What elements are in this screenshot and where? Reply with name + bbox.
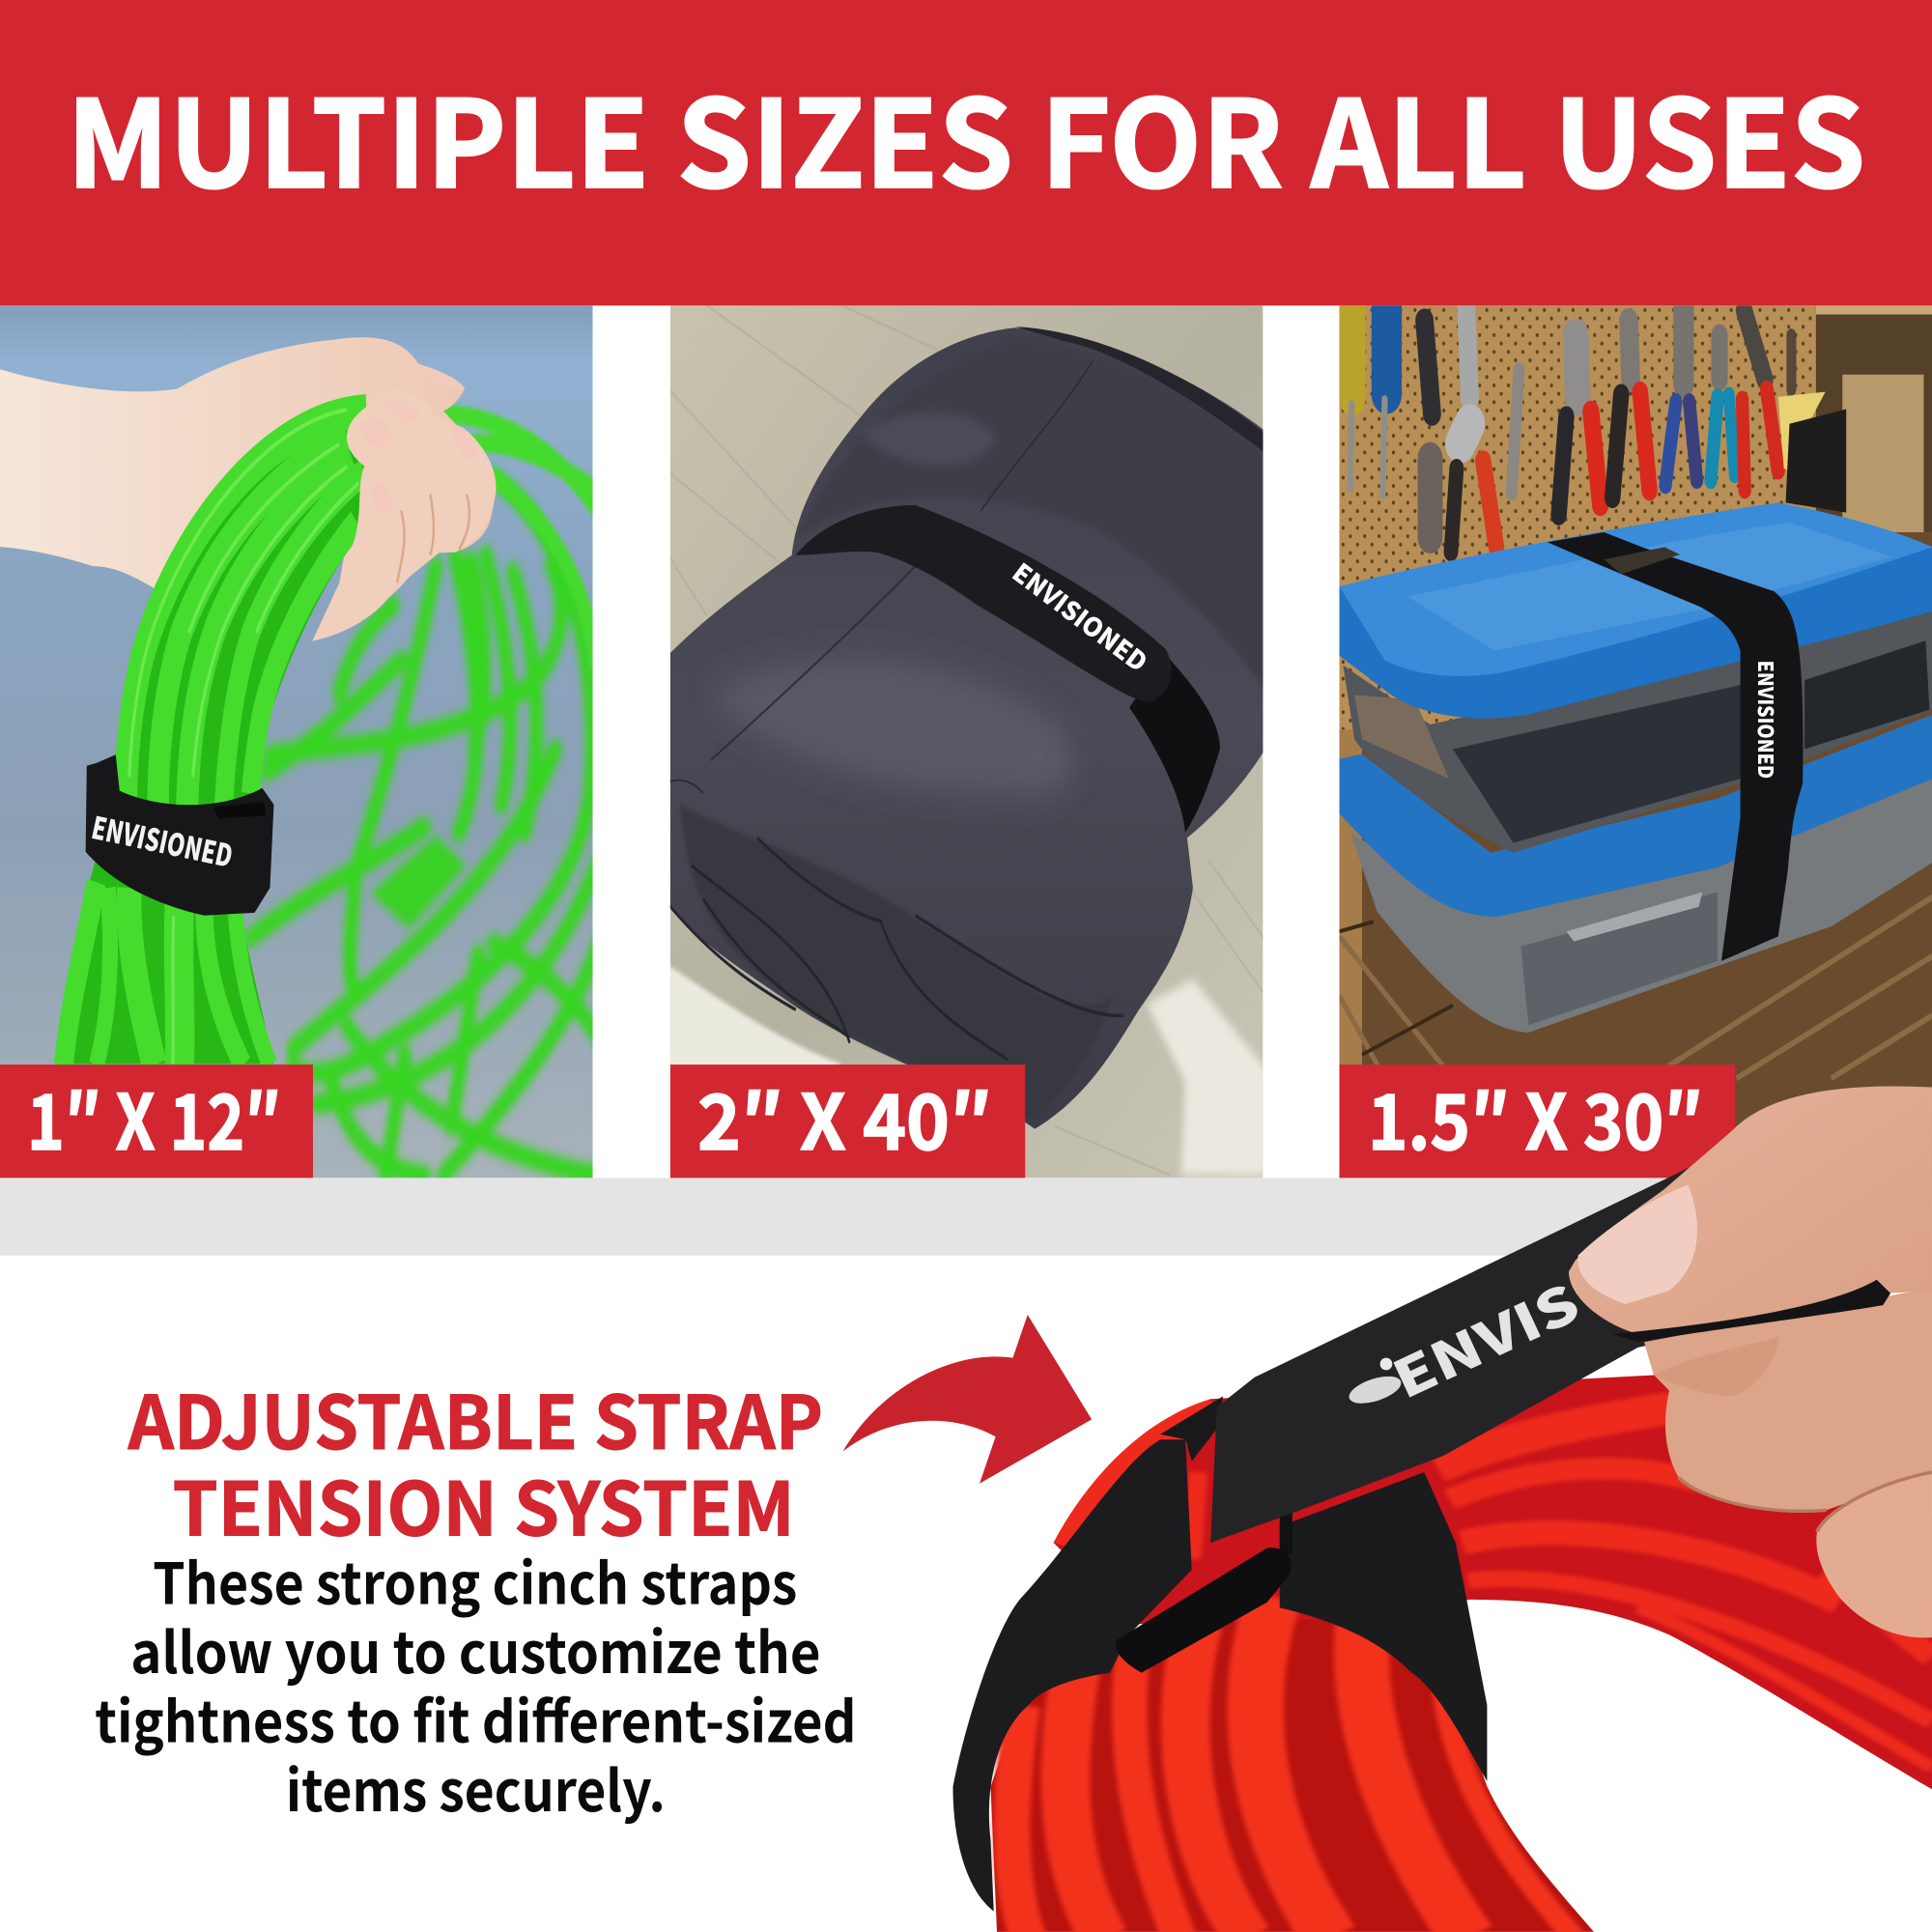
lower fingers <box>1644 1288 1932 1511</box>
strap ribbon <box>1210 1152 1889 1543</box>
title: MULTIPLE SIZES FOR ALL USES <box>67 47 1865 222</box>
photo panel: green extension cord: ENVISIONED <box>88 804 237 877</box>
wood grain <box>668 305 1267 1175</box>
callout body <box>95 1539 856 1828</box>
velcro band left <box>952 1439 1192 1912</box>
red cables back <box>1054 1353 1932 1789</box>
callout text block <box>95 1364 856 1828</box>
photo panel: sleeping bag: ENVISIONED <box>1006 553 1156 679</box>
callout body: allow you to customize the <box>130 1607 820 1690</box>
blurred green cable loops <box>251 477 599 1175</box>
hand and arm <box>0 337 495 641</box>
arrow <box>842 1315 1092 1484</box>
cable highlights <box>129 410 358 1065</box>
lower lid <box>1339 715 1932 917</box>
green cables <box>64 411 366 1065</box>
callout heading: TENSION SYSTEM <box>173 1450 795 1557</box>
folded end <box>680 805 1112 1121</box>
fingers <box>313 407 497 641</box>
upper roll shading <box>794 451 1264 688</box>
callout heading <box>128 1364 823 1557</box>
strap logo: ENVIS <box>1379 1263 1590 1413</box>
upper container <box>1343 611 1932 853</box>
photo panel: storage boxes <box>1339 305 1932 1178</box>
strap on green cord <box>86 754 273 916</box>
gray divider band <box>0 1178 1932 1256</box>
upper lid side <box>1339 547 1932 719</box>
callout heading: ADJUSTABLE STRAP <box>128 1364 823 1471</box>
size tag: 2 x 40: 2″ X 40″ <box>697 1061 992 1172</box>
quilting seams <box>668 361 1093 793</box>
thumb <box>1569 1086 1932 1334</box>
strap end <box>1613 1280 1890 1342</box>
near cable loops <box>436 413 602 661</box>
back shelf <box>1816 305 1932 532</box>
sheen <box>707 660 1074 795</box>
size tag: 1 x 12: 1″ X 12″ <box>27 1061 281 1172</box>
size tag: 1.5 x 30: 1.5″ X 30″ <box>1368 1061 1703 1172</box>
photo: hand cinching strap on red cord <box>952 1086 1932 1932</box>
callout body: These strong cinch straps <box>153 1539 797 1621</box>
photo panel: green extension cord <box>0 305 602 1178</box>
cable bundle base <box>62 401 366 1065</box>
sunlit floor <box>670 964 841 1065</box>
upper lid top <box>1339 502 1932 676</box>
zipper <box>1015 327 1268 455</box>
photo panel: storage boxes: ENVISIONED <box>1751 661 1781 779</box>
header banner <box>0 0 1932 305</box>
strap on boxes <box>1548 532 1803 961</box>
workbench <box>1339 729 1362 1078</box>
buckle <box>1116 1548 1292 1673</box>
buckle bar <box>1160 1396 1223 1462</box>
bag silhouette <box>668 327 1268 1129</box>
red cables front <box>991 1619 1594 1932</box>
photo panel: sleeping bag <box>668 305 1268 1178</box>
thumbnail <box>1577 1185 1697 1304</box>
velcro band right <box>1280 1472 1487 1781</box>
callout body: items securely. <box>286 1746 666 1828</box>
strap on sleeping bag <box>796 505 1172 702</box>
velcro tail <box>1129 655 1220 833</box>
strap logo <box>1346 1263 1590 1413</box>
hanging tools <box>1350 305 1791 552</box>
lower container <box>1350 774 1932 1033</box>
plug <box>370 835 467 929</box>
callout body: tightness to fit different-sized <box>95 1677 856 1759</box>
pegboard <box>1339 305 1832 750</box>
